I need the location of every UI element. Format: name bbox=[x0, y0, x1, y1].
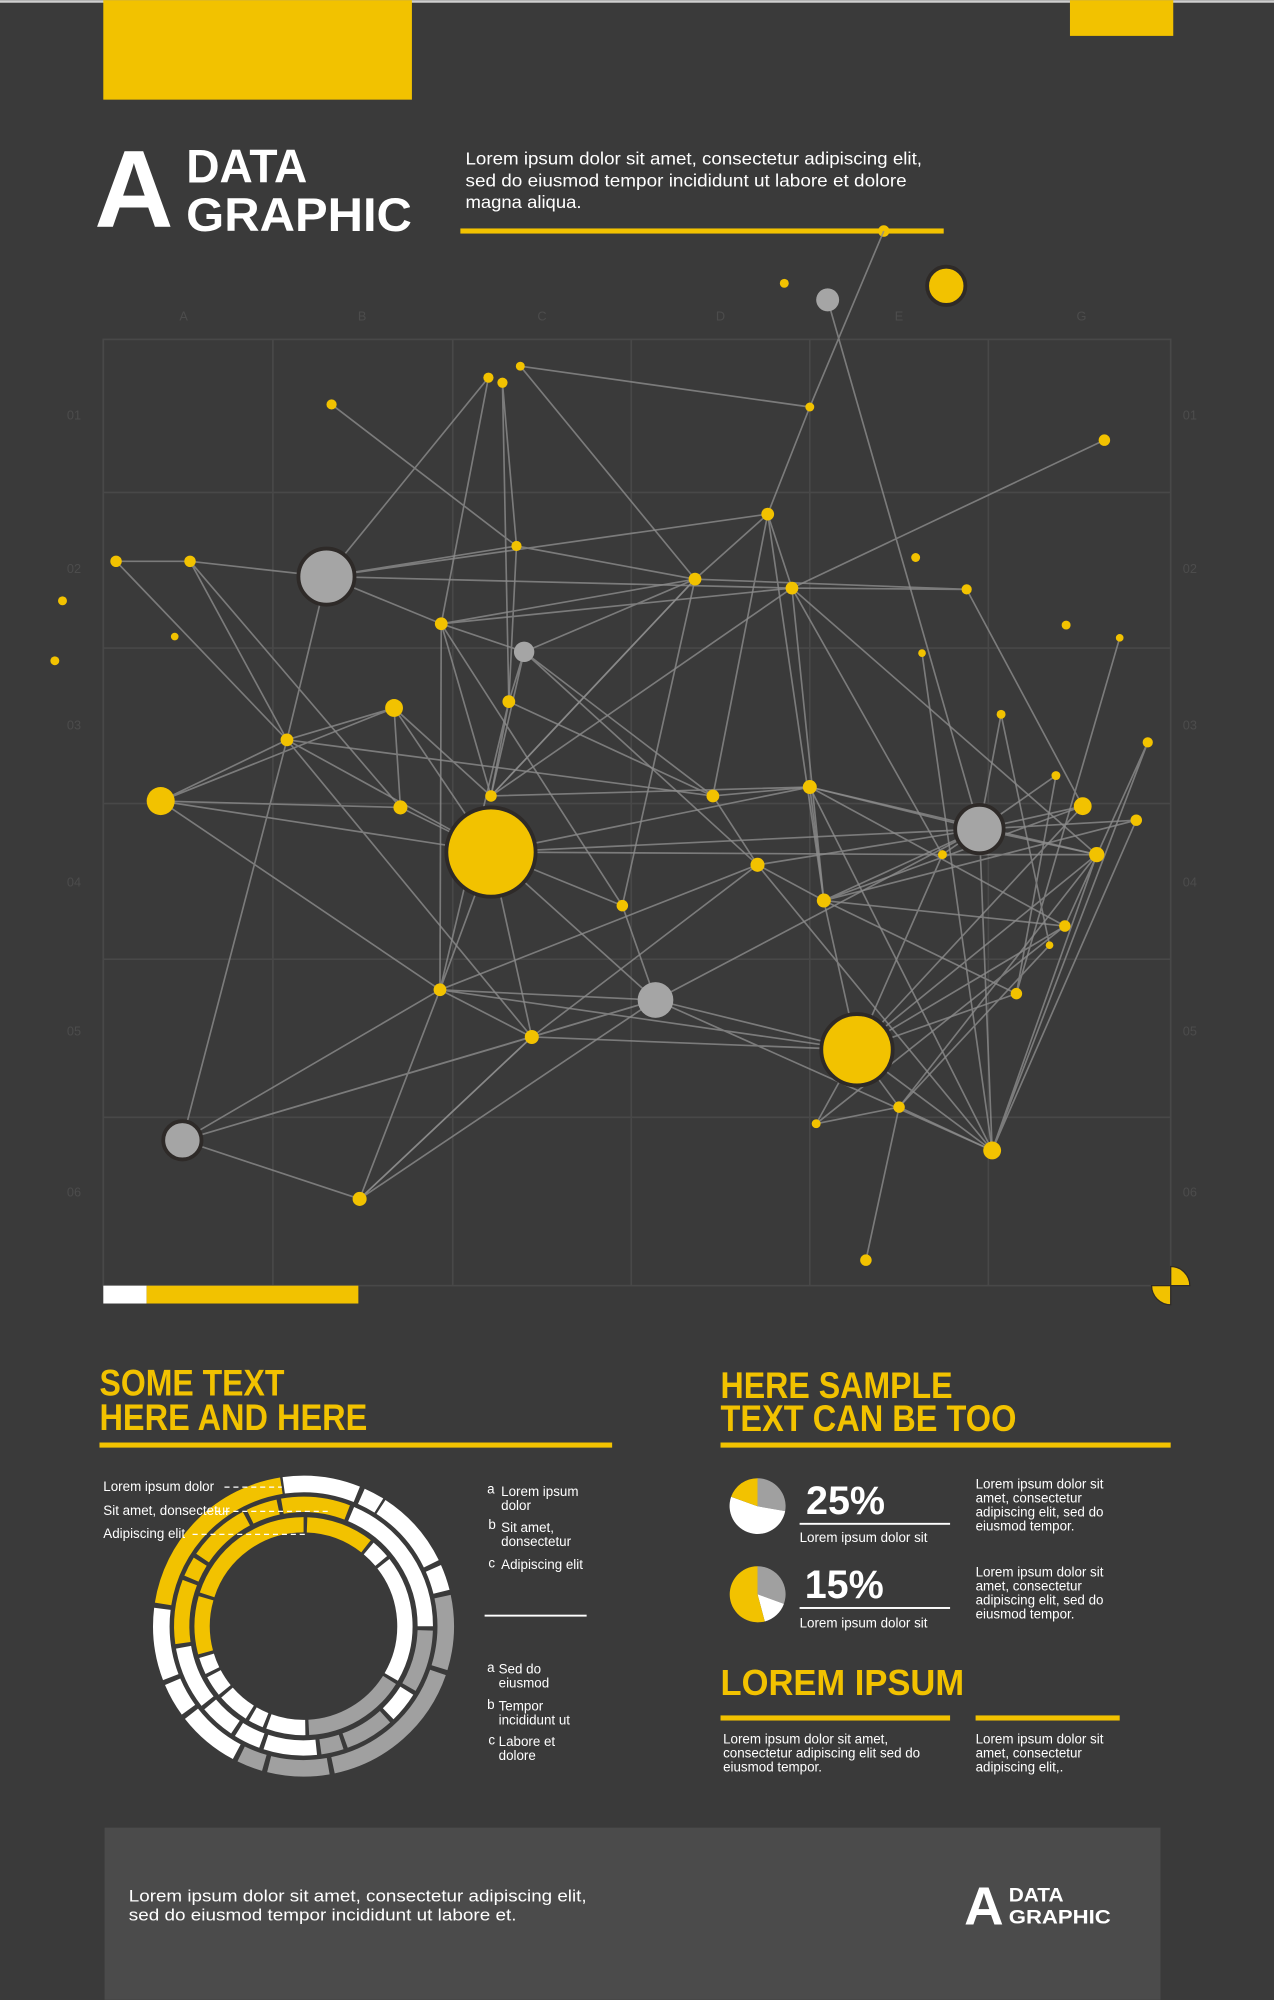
stat 15%: 15% bbox=[805, 1563, 884, 1607]
network chart bbox=[50, 231, 1153, 1266]
heading: some text here and here bbox=[99, 1362, 367, 1438]
intro underline with marker bbox=[460, 225, 944, 237]
grid axis labels: 03 bbox=[67, 718, 81, 733]
legend bottom: incididunt ut bbox=[499, 1712, 570, 1727]
stat descriptions: Lorem ipsum dolor sit bbox=[976, 1564, 1104, 1579]
heading: some text here and here: HERE AND HERE bbox=[99, 1397, 367, 1438]
legend top: Sit amet, bbox=[501, 1520, 554, 1535]
legend top: donsectetur bbox=[501, 1534, 572, 1549]
ring chart callout labels bbox=[103, 1479, 332, 1541]
grid axis labels: D bbox=[716, 308, 725, 323]
grid axis labels: 05 bbox=[67, 1024, 81, 1039]
ring chart callout labels: Sit amet, donsectetur bbox=[103, 1503, 230, 1518]
grid axis labels: 03 bbox=[1183, 718, 1197, 733]
legend top: a bbox=[487, 1482, 495, 1497]
legend bottom: b bbox=[487, 1697, 495, 1712]
stat descriptions: amet, consectetur bbox=[976, 1490, 1082, 1505]
legend bottom: a bbox=[487, 1660, 495, 1675]
footer logo: DATA bbox=[1009, 1886, 1064, 1907]
grid axis labels: A bbox=[179, 308, 188, 323]
heading: some text here and here: SOME TEXT bbox=[99, 1362, 285, 1403]
lorem ipsum text columns bbox=[723, 1731, 1104, 1775]
stat descriptions: eiusmod tempor. bbox=[976, 1519, 1074, 1534]
grid axis labels: 02 bbox=[67, 561, 81, 576]
lorem ipsum text columns: Lorem ipsum dolor sit bbox=[976, 1731, 1104, 1746]
grid axis labels: G bbox=[1076, 308, 1086, 323]
heading: lorem ipsum: LOREM IPSUM bbox=[721, 1663, 964, 1703]
pie chart 25% bbox=[730, 1478, 786, 1534]
ring chart callout labels: Lorem ipsum dolor bbox=[103, 1479, 215, 1494]
grid axis labels: 01 bbox=[1183, 408, 1197, 423]
large nodes bbox=[163, 267, 1004, 1159]
grid axis labels: 02 bbox=[1183, 561, 1197, 576]
lorem ipsum text columns: eiusmod tempor. bbox=[723, 1760, 822, 1775]
grid axis labels: 01 bbox=[67, 408, 81, 423]
stat descriptions: adipiscing elit, sed do bbox=[976, 1592, 1103, 1607]
pie chart 15% bbox=[730, 1566, 786, 1622]
grid axis labels: 04 bbox=[1183, 875, 1197, 890]
progress bar bbox=[103, 1286, 358, 1304]
title logo bbox=[94, 129, 412, 251]
ring chart callout labels: Adipiscing elit bbox=[103, 1526, 185, 1541]
grid axis labels: C bbox=[537, 308, 547, 323]
grid axis labels: E bbox=[895, 308, 903, 323]
footer text bbox=[129, 1887, 587, 1925]
grid axis labels bbox=[67, 308, 1197, 1199]
legend bottom: c bbox=[488, 1733, 495, 1748]
ring chart bbox=[105, 1428, 502, 1825]
stat 15% bbox=[800, 1563, 950, 1630]
legend bottom: dolore bbox=[499, 1748, 536, 1763]
stat 15%: Lorem ipsum dolor sit bbox=[800, 1615, 928, 1630]
legend bottom: Tempor bbox=[499, 1698, 544, 1713]
intro paragraph: sed do eiusmod tempor incididunt ut labore et dolore bbox=[465, 170, 907, 190]
legend top: dolor bbox=[501, 1498, 531, 1513]
grid axis labels: 05 bbox=[1183, 1024, 1197, 1039]
footer text: Lorem ipsum dolor sit amet, consectetur adipiscing elit, bbox=[129, 1887, 587, 1906]
footer logo: GRAPHIC bbox=[1009, 1907, 1111, 1928]
stat descriptions: eiusmod tempor. bbox=[976, 1607, 1074, 1622]
intro paragraph: magna aliqua. bbox=[465, 192, 582, 212]
legend bottom bbox=[487, 1660, 570, 1763]
legend top bbox=[487, 1482, 583, 1572]
heading: here sample text: TEXT CAN BE TOO bbox=[721, 1398, 1016, 1439]
stat descriptions: amet, consectetur bbox=[976, 1578, 1082, 1593]
stat descriptions: Lorem ipsum dolor sit bbox=[976, 1476, 1104, 1491]
grid axis labels: 06 bbox=[67, 1184, 81, 1199]
footer logo: A bbox=[964, 1878, 1004, 1937]
legend top: c bbox=[488, 1555, 495, 1570]
grid axis labels: 06 bbox=[1183, 1184, 1197, 1199]
stat 25%: 25% bbox=[806, 1479, 885, 1523]
stat 25% bbox=[800, 1479, 950, 1545]
grid axis labels: B bbox=[358, 308, 366, 323]
footer panel bbox=[105, 1828, 1161, 2000]
lorem ipsum text columns: Lorem ipsum dolor sit amet, bbox=[723, 1731, 888, 1746]
footer text: sed do eiusmod tempor incididunt ut labore et. bbox=[129, 1906, 516, 1925]
legend top: Adipiscing elit bbox=[501, 1557, 583, 1572]
corner icon bbox=[1152, 1267, 1190, 1305]
grid axis labels: 04 bbox=[67, 875, 81, 890]
stat descriptions bbox=[976, 1476, 1104, 1622]
intro paragraph bbox=[465, 149, 922, 212]
lorem ipsum text columns: amet, consectetur bbox=[976, 1746, 1082, 1761]
stat descriptions: adipiscing elit, sed do bbox=[976, 1504, 1103, 1519]
lorem ipsum text columns: adipiscing elit,. bbox=[976, 1760, 1063, 1775]
legend bottom: Sed do bbox=[499, 1661, 541, 1676]
decorative yellow block top left bbox=[103, 0, 412, 100]
heading: here sample text bbox=[721, 1365, 1016, 1439]
legend top: Lorem ipsum bbox=[501, 1484, 578, 1499]
title logo: A bbox=[94, 129, 173, 251]
heading: here sample text: HERE SAMPLE bbox=[721, 1365, 953, 1406]
legend bottom: eiusmod bbox=[499, 1675, 549, 1690]
lorem ipsum text columns: consectetur adipiscing elit sed do bbox=[723, 1746, 920, 1761]
legend top: b bbox=[488, 1517, 496, 1532]
title logo: GRAPHIC bbox=[186, 188, 412, 241]
footer logo bbox=[964, 1878, 1111, 1937]
title logo: DATA bbox=[186, 140, 307, 193]
stat 25%: Lorem ipsum dolor sit bbox=[800, 1530, 928, 1545]
intro paragraph: Lorem ipsum dolor sit amet, consectetur adipiscing elit, bbox=[465, 149, 922, 169]
legend bottom: Labore et bbox=[499, 1734, 555, 1749]
decorative yellow block top right bbox=[1070, 0, 1173, 36]
